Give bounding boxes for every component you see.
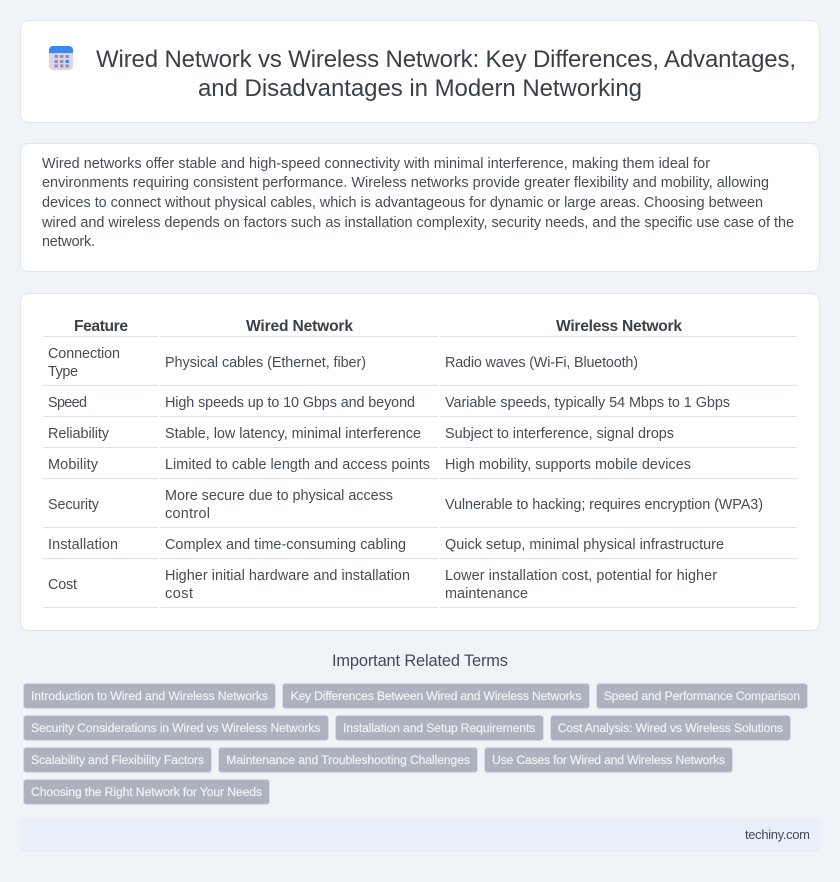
row: security: More secure due to physical access — [165, 488, 393, 504]
title: and Disadvantages in Modern Networking — [198, 75, 642, 102]
tag: Cost Analysis: Wired vs Wireless Solutions — [558, 721, 783, 735]
row: connection type: Type — [48, 364, 78, 380]
row: connection type — [48, 346, 638, 380]
tag — [24, 748, 212, 772]
row: reliability: Subject to interference, signal drops — [445, 426, 674, 442]
row: reliability: Stable, low latency, minimal interference — [165, 426, 421, 442]
tag — [596, 684, 808, 708]
row: speed: High speeds up to 10 Gbps and beyond — [165, 395, 415, 411]
row: reliability — [48, 426, 674, 442]
panel: header — [20, 20, 820, 122]
row: installation: Installation — [48, 537, 118, 553]
text block: introduction paragraph: environments requiring consistent performance. Wireless networks provide greater flexibility and mobility, allowing — [42, 175, 769, 191]
tag — [218, 748, 478, 772]
tag — [550, 716, 790, 740]
table header row: Wired Network — [246, 318, 353, 335]
title — [96, 46, 796, 102]
row: speed: Variable speeds, typically 54 Mbps to 1 Gbps — [445, 395, 730, 411]
text block: introduction paragraph: wired and wireless depends on factors such as installation complexity, security needs, and the specific use case of the — [41, 215, 794, 231]
text block: introduction paragraph — [41, 156, 794, 250]
tag: Security Considerations in Wired vs Wireless Networks — [31, 721, 320, 735]
text block: introduction paragraph: network. — [42, 234, 95, 250]
tag — [336, 716, 544, 740]
row: cost: Cost — [48, 577, 77, 593]
tag — [282, 684, 590, 708]
footer — [20, 818, 820, 852]
tag — [484, 748, 732, 772]
panel: comparison table — [20, 294, 820, 630]
row: speed — [48, 395, 730, 411]
row: cost — [48, 568, 717, 602]
tag: Introduction to Wired and Wireless Networks — [31, 689, 268, 703]
row: cost: cost — [165, 586, 193, 602]
row: installation: Quick setup, minimal physical infrastructure — [445, 537, 724, 553]
row: security: Vulnerable to hacking; requires encryption (WPA3) — [445, 497, 763, 513]
row: security — [48, 488, 763, 522]
footer: techiny.com — [745, 827, 810, 842]
row: security: Security — [48, 497, 100, 513]
table header row — [74, 318, 682, 335]
panel: related term tags — [24, 684, 808, 804]
tag: Scalability and Flexibility Factors — [31, 753, 204, 767]
tag: Choosing the Right Network for Your Needs — [31, 785, 262, 799]
tag: Speed and Performance Comparison — [604, 689, 800, 703]
row: speed: Speed — [48, 395, 87, 411]
table header row: Wireless Network — [556, 318, 682, 335]
title: Wired Network vs Wireless Network: Key Differences, Advantages, — [96, 46, 796, 73]
row: mobility: High mobility, supports mobile devices — [445, 457, 691, 473]
row: installation: Complex and time-consuming cabling — [165, 537, 406, 553]
text block: introduction paragraph: Wired networks offer stable and high-speed connectivity with minimal interference, making them ideal for — [42, 156, 710, 172]
tag: Use Cases for Wired and Wireless Networks — [492, 753, 725, 767]
tag: Key Differences Between Wired and Wireless Networks — [290, 689, 582, 703]
tag — [24, 716, 328, 740]
row: cost: Higher initial hardware and installation — [165, 568, 410, 584]
row: installation — [48, 537, 724, 553]
tag: Maintenance and Troubleshooting Challenges — [226, 753, 470, 767]
tag — [24, 684, 276, 708]
tag — [24, 780, 270, 804]
heading: important related terms: Important Related Terms — [332, 652, 508, 670]
tag: Installation and Setup Requirements — [343, 721, 535, 735]
row: mobility — [48, 457, 691, 473]
icon: calendar — [49, 46, 73, 70]
row: connection type: Radio waves (Wi-Fi, Bluetooth) — [445, 355, 638, 371]
row: reliability: Reliability — [48, 426, 110, 442]
row: cost: maintenance — [445, 586, 528, 602]
panel: introduction — [20, 144, 820, 272]
row: security: control — [165, 506, 210, 522]
row: cost: Lower installation cost, potential for higher — [445, 568, 717, 584]
row: connection type: Physical cables (Ethernet, fiber) — [165, 355, 366, 371]
text block: introduction paragraph: devices to connect without physical cables, which is advantageous for dynamic or large areas. Choosing between — [42, 195, 763, 211]
row: mobility: Mobility — [48, 457, 99, 473]
row: mobility: Limited to cable length and access points — [165, 457, 430, 473]
row: connection type: Connection — [48, 346, 120, 362]
table header row: Feature — [74, 318, 128, 335]
